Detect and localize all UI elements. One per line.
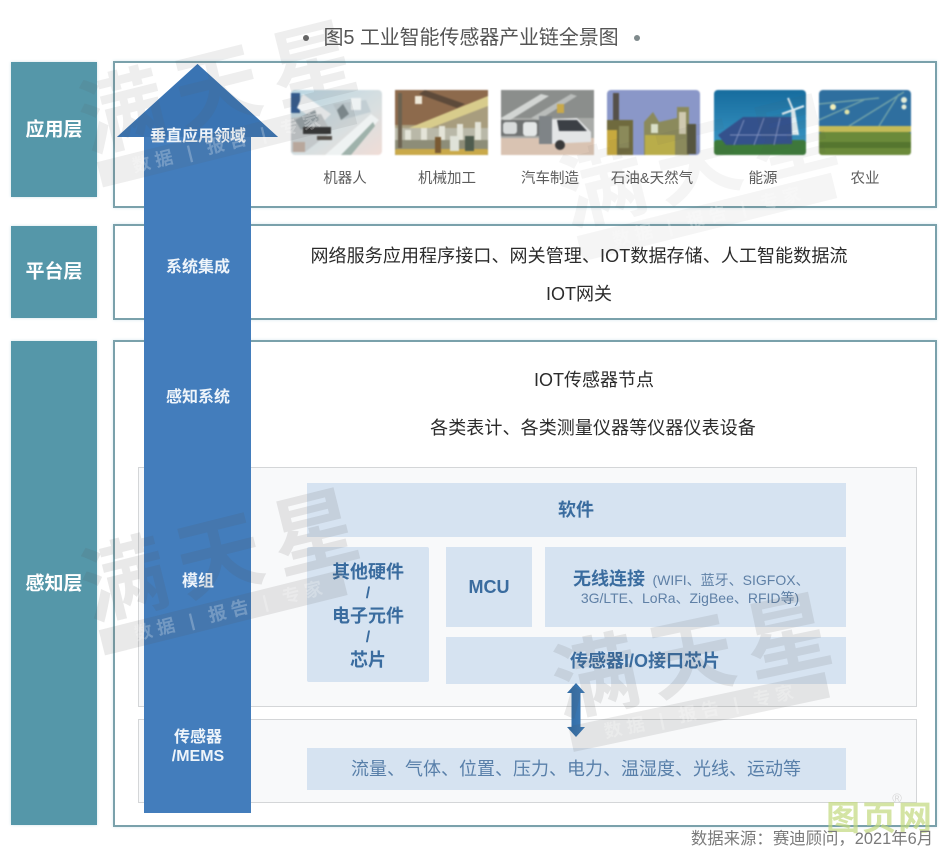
panel: application [113,61,937,208]
block: sensor IO chip: 传感器I/O接口芯片 [570,651,720,671]
block: sensor types: 流量、气体、位置、压力、电力、温湿度、光线、运动等 [351,759,801,779]
watermark 1: 数据 | 报告 | 专家 [130,108,327,176]
separator 2: / [366,629,370,646]
image: oil and gas [606,89,701,156]
image: agriculture [818,89,912,156]
watermark 4: 数据 | 报告 | 专家 [602,680,800,742]
panel: platform [113,224,937,320]
caption: agriculture: 农业 [850,171,880,187]
logo text: 图页网 [826,800,934,838]
wireless list line 2: 3G/LTE、LoRa、ZigBee、RFID等) [581,590,799,606]
text: IoT gateway: IOT网关 [546,284,612,304]
arrow label: vertical applications: 垂直应用领域 [150,128,246,145]
logo: tuye watermark [826,790,934,838]
layer label: perception [11,341,97,825]
watermark 4: 满天星 [544,580,852,735]
image: energy [713,89,807,156]
title: 图5 工业智能传感器产业链全景图 [323,27,619,49]
panel: sensor group [138,719,917,803]
caption: machining: 机械加工 [418,171,476,187]
arrow: vertical value chain [117,64,278,813]
block: MCU [446,547,532,627]
arrow label: sensors: 传感器 [174,729,222,746]
block: sensor IO chip [446,637,846,684]
image: robot [290,89,382,156]
block: MCU: MCU [468,577,510,597]
layer label: application [11,62,97,197]
layer label: application: 应用层 [25,120,83,140]
text: IoT sensor node: IOT传感器节点 [534,370,654,390]
watermark 2: 满天星 [549,80,858,244]
block: sensor types [307,748,846,790]
registered mark: ® [892,790,902,806]
block: software [307,483,846,537]
wireless list line 1: (WIFI、蓝牙、SIGFOX、 [652,572,810,588]
watermark 3: 数据 | 报告 | 专家 [132,576,329,644]
title bullet left [303,35,309,41]
layer label: perception: 感知层 [25,574,83,594]
block: wireless connection [545,547,846,627]
arrow: double headed link [567,683,585,737]
other hardware line 3: 芯片 [350,650,386,670]
text: meters and instruments: 各类表计、各类测量仪器等仪器仪表设备 [430,418,756,438]
arrow label: system integration: 系统集成 [166,259,230,276]
watermark 3: 满天星 [71,474,380,638]
watermark 1: 满天星 [69,6,378,170]
wireless heading: 无线连接 [573,569,645,589]
other hardware line 1: 其他硬件 [332,562,404,582]
panel: module group [138,467,917,707]
layer label: platform: 平台层 [25,262,83,282]
image: car manufacturing [500,89,595,156]
title bullet right [634,35,640,41]
layer label: platform [11,226,97,318]
caption: energy: 能源 [748,171,778,187]
source note: 数据来源：赛迪顾问，2021年6月 [691,830,933,848]
watermark 2: 数据 | 报告 | 专家 [610,182,807,250]
text: platform services: 网络服务应用程序接口、网关管理、IOT数据存储、人工智能数据流 [310,246,848,266]
panel: perception [113,340,937,827]
block: other hardware [307,547,429,682]
arrow label: MEMS: /MEMS [172,748,224,765]
caption: oil and gas: 石油&天然气 [611,171,693,187]
arrow label: sensing systems: 感知系统 [166,389,230,406]
image: machining [394,89,489,156]
caption: car manufacturing: 汽车制造 [521,171,579,187]
other hardware line 2: 电子元件 [332,606,404,626]
separator 1: / [366,585,370,602]
arrow label: module: 模组 [182,573,214,590]
caption: robot: 机器人 [323,171,367,187]
block: software: 软件 [558,500,594,520]
